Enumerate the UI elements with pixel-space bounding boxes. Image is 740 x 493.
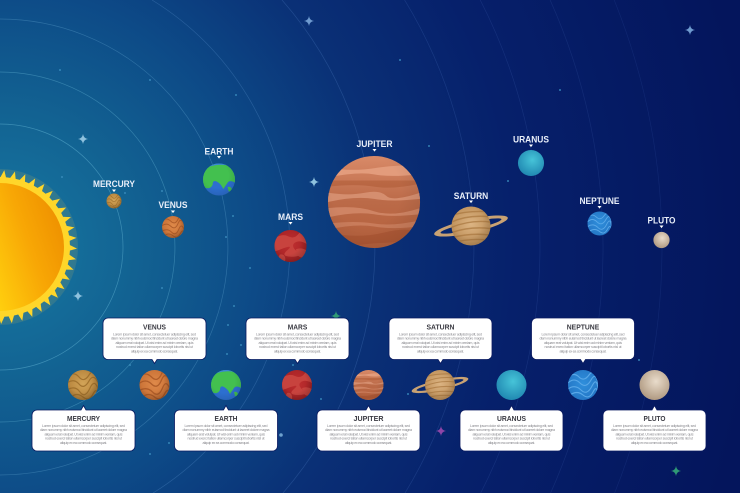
card: Earth [174,406,278,451]
body text: aliquip ex ea commodo consequat. [274,349,321,353]
top planet: Mercury: MERCURY [93,179,136,190]
body text: aliquam erat volutpat. Ut wisi enim ad minim veniam, quis [187,432,265,436]
top planet: Saturn: SATURN [454,191,488,202]
body text [468,424,555,445]
body text: Lorem ipsum dolor sit amet, consectetuer adipiscing elit, sed [399,332,482,336]
body text: diam nonummy nibh euismod tincidunt ut laoreet dolore magna [182,428,270,432]
heading: EARTH [214,414,238,423]
body text: nostrud exerci tation ullamcorper suscipit lobortis nisl ut [116,345,193,349]
body text: Lorem ipsum dolor sit amet, consectetuer adipiscing elit, sed [42,424,125,428]
heading: SATURN [426,322,454,332]
body text: nostrud exerci tation ullamcorper suscipit lobortis nisl ut [402,345,479,349]
top planet: Neptune [580,196,620,236]
body text: nostrud exerci tation ullamcorper suscipit lobortis nisl ut [473,437,550,441]
body text: aliquip ex ea commodo consequat. [345,441,392,445]
card: Pluto [603,406,706,451]
card: Saturn [389,318,492,364]
card: Neptune [532,318,634,364]
heading: NEPTUNE [567,322,599,332]
bottom planet: Mars [280,370,312,400]
body text: diam nonummy nibh euismod tincidunt ut laoreet dolore magna [111,337,198,341]
body text: Lorem ipsum dolor sit amet, consectetuer adipiscing elit, sed [327,424,410,428]
heading: MERCURY [67,414,100,423]
body text: Lorem ipsum dolor sit amet, consectetuer adipiscing elit, sed [470,424,553,428]
body text: diam nonummy nibh euismod tincidunt ut laoreet dolore magna [254,337,341,341]
body text: nostrud exerci tation ullamcorper suscipit lobortis nisl ut [616,437,693,441]
top planet: Earth [203,146,235,196]
body text: nostrud exerci tation ullamcorper suscipit lobortis nisl ut [330,437,407,441]
card: Mars [246,318,349,364]
top planet: Earth: EARTH [204,146,234,158]
body text [254,332,341,353]
top planet: Neptune: NEPTUNE [580,196,620,207]
top planet: Venus: VENUS [158,200,188,211]
body text: diam nonummy nibh euismod tincidunt ut laoreet dolore magna [397,337,484,341]
top planet: Saturn [433,191,509,246]
body text: nostrud exerci tation ullamcorper suscipit lobortis nisl ut [544,345,621,349]
body text: diam nonummy nibh euismod tincidunt ut laoreet dolore magna [468,428,555,432]
top planet: Mercury [93,179,136,208]
card: Uranus [460,406,563,451]
body text: aliquam erat volutpat. Ut wisi enim ad minim veniam, quis [402,341,480,345]
body text: Lorem ipsum dolor sit amet, consectetuer adipiscing elit, sed [542,332,624,336]
body text: diam nonummy nibh euismod tincidunt ut laoreet dolore magna [611,428,698,432]
body text: Lorem ipsum dolor sit amet, consectetuer adipiscing elit, sed [184,424,268,428]
body text [182,424,270,445]
body text: aliquip ex ea commodo consequat. [202,441,250,445]
body text: aliquam erat volutpat. Ut wisi enim ad minim veniam, quis [544,341,622,345]
card: Mercury [32,406,135,451]
body text: diam nonummy nibh euismod tincidunt ut laoreet dolore magna [540,337,626,341]
top planet: Jupiter [328,139,420,248]
top planet: Mars: MARS [278,212,303,223]
heading: VENUS [143,322,166,332]
bottom planet: Earth [211,370,241,400]
card: Jupiter [317,406,420,451]
body text: aliquam erat volutpat. Ut wisi enim ad minim veniam, quis [472,432,551,436]
bottom planet: Uranus [496,370,526,400]
body text [540,332,626,353]
top planet: Mars [272,212,307,262]
body text [40,424,127,445]
body text: nostrud exerci tation ullamcorper suscipit lobortis nisl ut [259,345,336,349]
body text [397,332,484,353]
body text: aliquip ex ea commodo consequat. [417,349,464,353]
body text: Lorem ipsum dolor sit amet, consectetuer adipiscing elit, sed [256,332,339,336]
body text: aliquam erat volutpat. Ut wisi enim ad minim veniam, quis [116,341,194,345]
body text: aliquip ex ea commodo consequat. [560,349,606,353]
body text: diam nonummy nibh euismod tincidunt ut laoreet dolore magna [325,428,412,432]
top planet: Pluto [648,216,676,248]
heading: URANUS [497,414,526,423]
body text: aliquip ex ea commodo consequat. [488,441,535,445]
body text [325,424,412,445]
body text [111,332,198,353]
body text: Lorem ipsum dolor sit amet, consectetuer adipiscing elit, sed [113,332,196,336]
body text: aliquam erat volutpat. Ut wisi enim ad minim veniam, quis [616,432,694,436]
top planet: Pluto: PLUTO [648,216,676,226]
top planet: Venus [158,200,188,238]
body text: Lorem ipsum dolor sit amet, consectetuer adipiscing elit, sed [613,424,696,428]
heading: JUPITER [354,414,384,423]
bottom planet: Jupiter [354,370,384,400]
body text: aliquip ex ea commodo consequat. [631,441,678,445]
top planet: Jupiter: JUPITER [356,139,393,150]
body text: aliquip ex ea commodo consequat. [131,349,178,353]
bottom planet: Mercury [67,370,99,400]
bottom planet: Saturn [411,370,469,400]
body text: aliquam erat volutpat. Ut wisi enim ad minim veniam, quis [258,341,337,345]
bottom planet: Pluto [640,370,670,400]
body text: nostrud exerci tation ullamcorper suscipit lobortis nisl ut [188,437,264,441]
heading: MARS [288,322,307,332]
card: Venus [103,318,206,364]
heading: PLUTO [644,414,666,423]
body text [611,424,698,445]
body text: nostrud exerci tation ullamcorper suscipit lobortis nisl ut [45,437,122,441]
top planet: Uranus: URANUS [513,134,549,146]
body text: aliquip ex ea commodo consequat. [60,441,107,445]
top planet: Uranus [513,134,549,176]
bottom planet: Neptune [568,370,598,400]
body text: aliquam erat volutpat. Ut wisi enim ad minim veniam, quis [44,432,123,436]
body text: aliquam erat volutpat. Ut wisi enim ad minim veniam, quis [330,432,408,436]
sun [0,169,78,325]
body text: diam nonummy nibh euismod tincidunt ut laoreet dolore magna [40,428,127,432]
bottom planet: Venus [138,370,170,400]
